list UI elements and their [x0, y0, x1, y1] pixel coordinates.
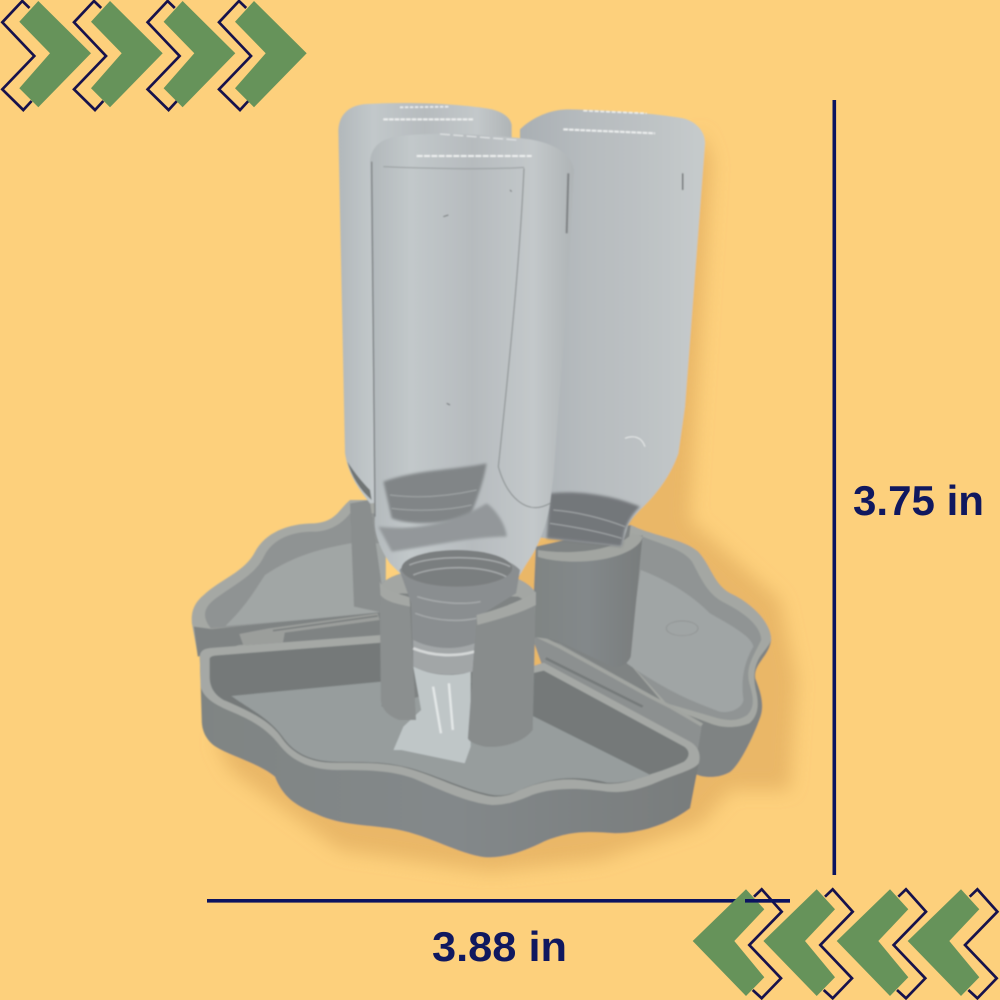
tray inner wall: [210, 643, 689, 797]
dimension line: width: [207, 899, 790, 903]
reflection edges: [498, 168, 550, 508]
dimension line: height: [832, 100, 836, 875]
post: back right: [532, 533, 643, 667]
tray floor: [231, 682, 651, 795]
tray: back right: [532, 525, 771, 777]
icon: chevrons bottom right: [693, 889, 997, 998]
product photo: bottle tray: [192, 103, 797, 872]
label: width 3.88 in: 3.88 in: [432, 923, 567, 970]
inner neck shadow: [383, 463, 487, 523]
tray top rim: [200, 635, 700, 805]
drop shadow: [215, 130, 797, 872]
label: height 3.75 in: 3.75 in: [853, 477, 984, 524]
tray: front: [200, 635, 700, 857]
post: back left: [350, 500, 386, 613]
bottle: back right: [520, 109, 705, 547]
line overlap on chevron: [745, 899, 790, 903]
tray outer wall: [200, 635, 700, 857]
icon: chevrons top left: [2, 1, 307, 110]
bottle: back left: [338, 103, 512, 503]
post: front back ring: [380, 568, 536, 707]
post: front pieces: [380, 582, 536, 747]
tray: back left: [192, 500, 386, 657]
bottle: front: [370, 134, 574, 580]
bottle neck and spout: [394, 550, 520, 763]
